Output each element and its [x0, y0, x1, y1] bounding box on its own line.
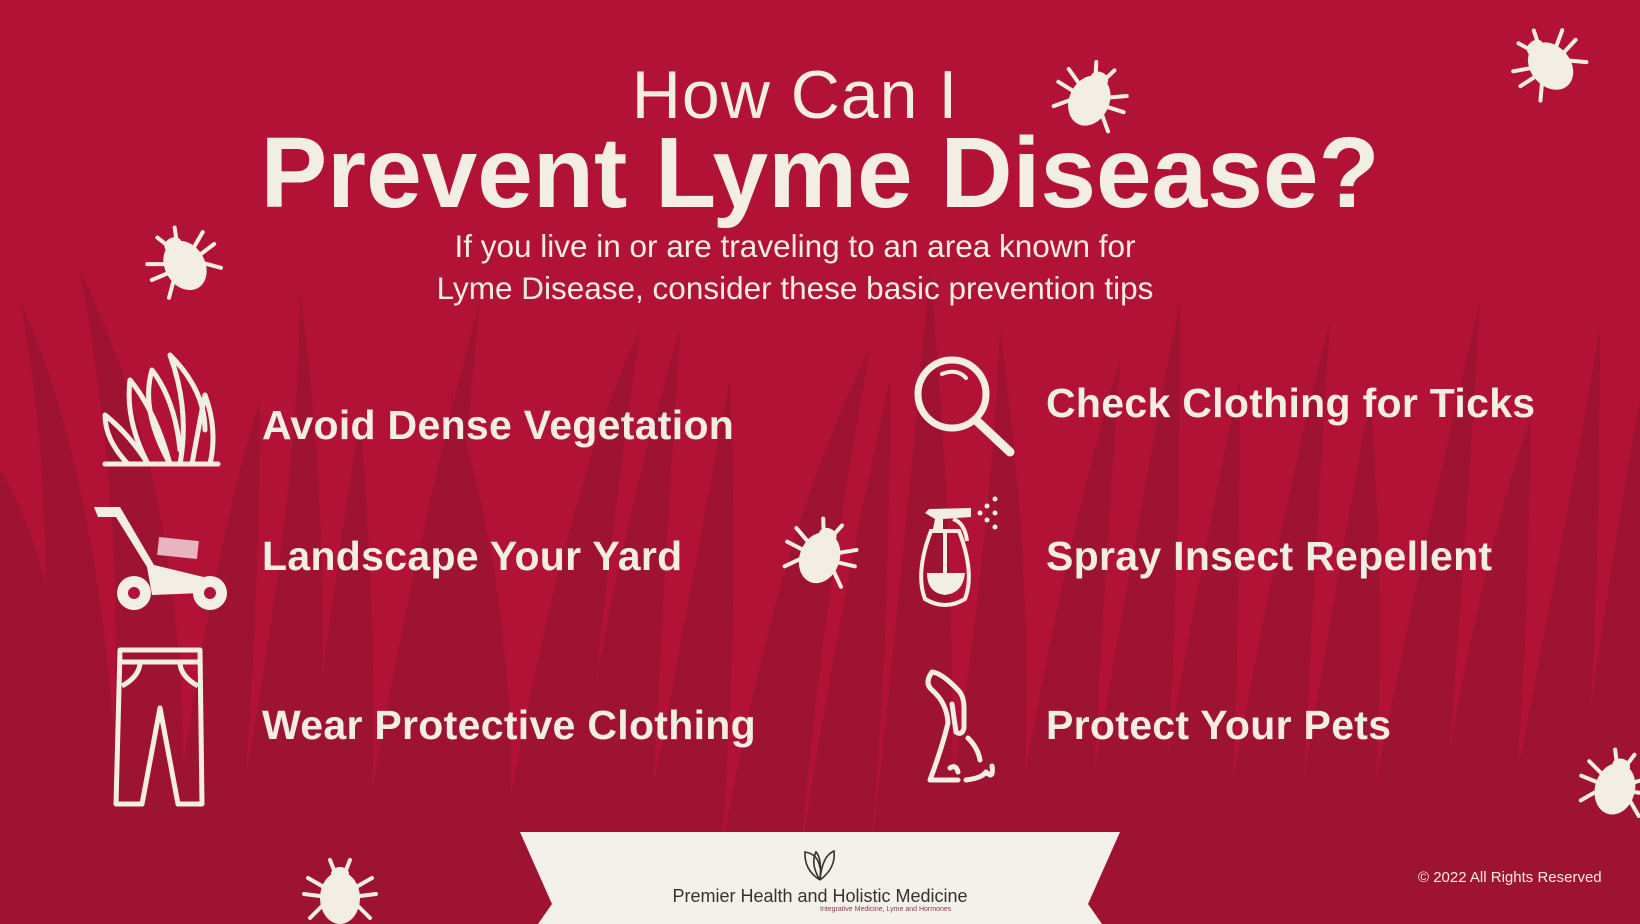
banner: logo: Integrative Medicine, Lyme and Hormones: [820, 906, 951, 913]
title line 1: How Can I: [632, 57, 958, 133]
item: spray repellent: Spray Insect Repellent: [1046, 533, 1492, 579]
subtitle: [437, 228, 1153, 306]
item: landscape yard: Landscape Your Yard: [262, 533, 682, 579]
icon: lawn mower: [94, 507, 227, 610]
icon: dog: [925, 670, 995, 782]
icon: grass: [102, 352, 220, 466]
item: check clothing: Check Clothing for Ticks: [1046, 380, 1535, 426]
item: avoid dense vegetation: Avoid Dense Vegetation: [262, 402, 734, 448]
icon: magnifier: [914, 356, 1014, 456]
icon: leaf heart: [804, 850, 835, 881]
subtitle: Lyme Disease, consider these basic prevention tips: [437, 270, 1153, 306]
item: protective clothing: Wear Protective Clothing: [262, 702, 756, 748]
logo text: Premier Health and Holistic Medicine: [672, 886, 968, 906]
title line 2: Prevent Lyme Disease?: [260, 117, 1380, 229]
banner: logo: [520, 832, 1120, 924]
icon: pants: [114, 648, 204, 806]
item: protect pets: Protect Your Pets: [1046, 702, 1391, 748]
subtitle: If you live in or are traveling to an area known for: [454, 228, 1136, 264]
icon: spray bottle: [919, 496, 998, 607]
copyright: © 2022 All Rights Reserved: [1418, 869, 1602, 886]
